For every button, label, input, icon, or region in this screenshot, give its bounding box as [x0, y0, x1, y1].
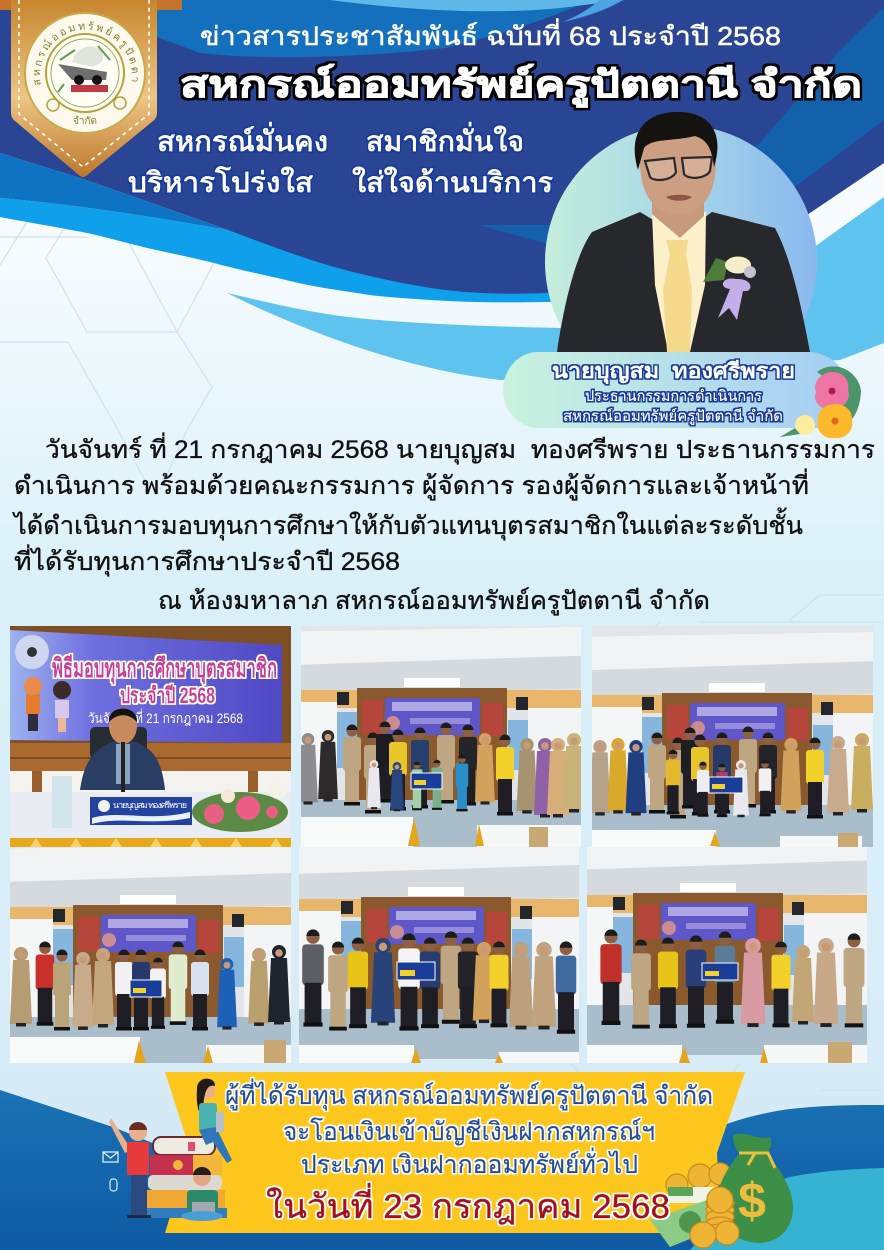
- seated chairman: [80, 708, 165, 792]
- body paragraph: ได้ดำเนินการมอบทุนการศึกษาให้กับตัวแทนบุตรสมาชิกในแต่ละระดับชั้น: [12, 507, 803, 541]
- newsletter heading: ข่าวสารประชาสัมพันธ์ ฉบับที่ 68 ประจำปี 2568: [200, 18, 781, 51]
- footer waves: [0, 1090, 884, 1250]
- banknotes: [650, 1187, 717, 1247]
- slogans: สมาชิกมั่นใจ: [366, 122, 524, 157]
- chairman position: ประธานกรรมการดำเนินการ: [585, 388, 762, 405]
- icon: tropical flowers: [780, 366, 861, 438]
- body paragraph: ณ ห้องมหาลาภ สหกรณ์ออมทรัพย์ครูปัตตานี จำกัด: [158, 587, 710, 616]
- money bag: [717, 1134, 793, 1243]
- money bag: $: [738, 1173, 766, 1229]
- logo seal: [24, 12, 146, 134]
- banner in photo 1: [10, 630, 282, 743]
- slogans: บริหารโปร่งใส: [128, 166, 313, 198]
- slogans: ใส่ใจด้านบริการ: [352, 166, 553, 198]
- seated woman: [197, 1079, 232, 1163]
- cheque board: [709, 777, 743, 793]
- banner in photo 1: พิธีมอบทุนการศึกษาบุตรสมาชิก: [52, 653, 277, 685]
- yellow banner: [165, 1072, 745, 1233]
- body paragraph: วันจันทร์ ที่ 21 กรกฎาคม 2568 นายบุญสม ทองศรีพราย ประธานกรรมการ: [45, 432, 875, 465]
- main title: สหกรณ์ออมทรัพย์ครูปัตตานี จำกัด: [180, 64, 862, 108]
- background hexagon pattern: [0, 222, 884, 1090]
- name card: นายบุญสม ทองศรีพราย: [113, 800, 187, 811]
- icon: corsage: [703, 256, 756, 320]
- slogans: สหกรณ์มั่นคง: [157, 122, 328, 157]
- book stack: [146, 1137, 227, 1218]
- photo 5: group with scholarship recipients: [299, 847, 579, 1063]
- cheque board: [130, 980, 162, 997]
- flower arrangement: [192, 781, 288, 832]
- body paragraph: [12, 432, 875, 616]
- banner line 1: ผู้ที่ได้รับทุน สหกรณ์ออมทรัพย์ครูปัตตานี จำกัด: [225, 1078, 713, 1111]
- badge ribbon with logo: [0, 0, 182, 177]
- banner line 3: ประเภท เงินฝากออมทรัพย์ทั่วไป: [301, 1147, 638, 1179]
- body paragraph: ดำเนินการ พร้อมด้วยคณะกรรมการ ผู้จัดการ รองผู้จัดการและเจ้าหน้าที่: [14, 468, 809, 501]
- standing student: [109, 1118, 151, 1218]
- logo seal: จำกัด: [73, 116, 97, 127]
- name plate: [503, 352, 847, 428]
- banner in photo 1: วันจันทร์ ที่ 21 กรกฎาคม 2568: [88, 709, 243, 726]
- coins behind: [666, 1163, 731, 1196]
- seated boy: [181, 1167, 223, 1221]
- chairman organisation: สหกรณ์ออมทรัพย์ครูปัตตานี จำกัด: [563, 408, 783, 425]
- photo 3: group with scholarship recipients: [592, 626, 873, 847]
- name card: [90, 797, 192, 825]
- slogans: [128, 122, 553, 198]
- body paragraph: ที่ได้รับทุนการศึกษาประจำปี 2568: [14, 544, 400, 577]
- photo 4: group with scholarship recipients: [10, 847, 291, 1063]
- banner line 2: จะโอนเงินเข้าบัญชีเงินฝากสหกรณ์ฯ: [283, 1117, 655, 1146]
- icon: mouse pointer: [110, 1179, 117, 1191]
- transfer date: ในวันที่ 23 กรกฎาคม 2568: [266, 1183, 670, 1226]
- illustration: money bag and coins: [650, 1134, 793, 1248]
- portrait of chairman: [557, 112, 810, 352]
- coins front: [690, 1187, 739, 1248]
- cheque board: [397, 962, 435, 980]
- cheque board: [411, 773, 442, 789]
- photo 6: group with scholarship recipients: [587, 847, 867, 1063]
- photo 2: group with scholarship recipients: [301, 626, 581, 847]
- chairman name: นายบุญสม ทองศรีพราย: [552, 359, 795, 385]
- water bottles: [52, 776, 72, 828]
- portrait circle: [545, 125, 817, 399]
- photo 1: chairman at desk: [10, 626, 291, 847]
- illustration: students and books: [103, 1079, 232, 1221]
- header wave shapes: [0, 0, 884, 380]
- cheque board: [702, 963, 738, 980]
- icon: envelope: [103, 1152, 118, 1162]
- banner in photo 1: ประจำปี 2568: [120, 683, 215, 708]
